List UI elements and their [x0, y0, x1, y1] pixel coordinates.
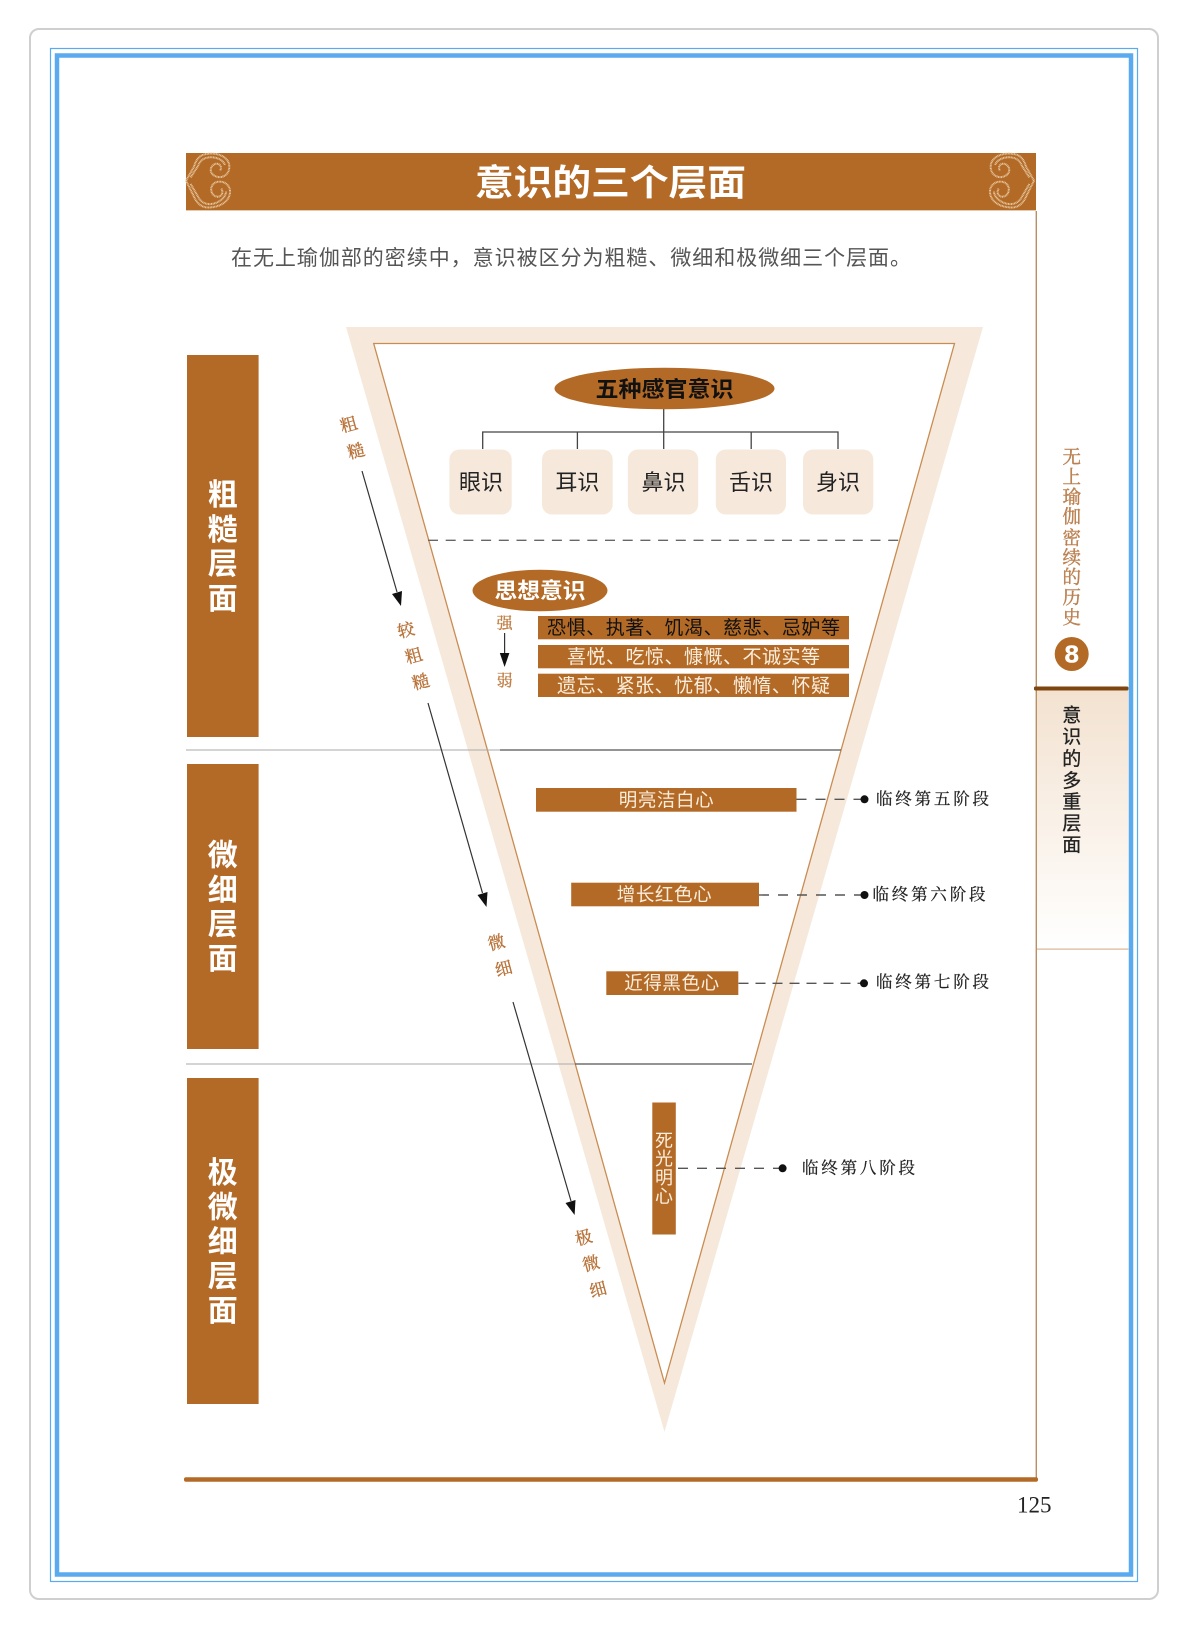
- box: body consciousness: [803, 450, 873, 514]
- callout: stage five: 临终第五阶段: [876, 790, 990, 808]
- icon: right cloud ornament: [990, 154, 1034, 208]
- callout: stage eight: [678, 1158, 916, 1178]
- level divider 1: [186, 749, 841, 751]
- panel: subtle level label: 细: [208, 874, 238, 908]
- bar: red increase mind: [571, 883, 759, 906]
- panel: very subtle level label: 细: [208, 1226, 238, 1259]
- side chapter title: 续: [1062, 548, 1081, 569]
- diagonal label: subtle: 微: [486, 932, 507, 954]
- side chapter title: 上: [1062, 468, 1081, 488]
- side chapter title: 密: [1062, 528, 1081, 550]
- bar: white appearance mind: [536, 788, 796, 812]
- side chapter title: 历: [1062, 588, 1081, 609]
- side chapter title: 史: [1062, 608, 1081, 629]
- icon: left cloud ornament: [186, 154, 230, 208]
- box: body consciousness: 身识: [816, 470, 860, 495]
- callout: stage seven: [738, 972, 990, 991]
- panel: subtle level label: 层: [208, 908, 238, 942]
- arrow: strong to weak: [500, 633, 509, 667]
- ellipse: five sense consciousness: 五种感官意识: [596, 377, 734, 402]
- bar: white appearance mind: 明亮洁白心: [619, 790, 714, 810]
- diagonal label: very subtle: 极: [573, 1227, 594, 1249]
- panel: very subtle level label: 微: [208, 1192, 238, 1224]
- bar: emotions row 2: 喜悦、吃惊、慷慨、不诚实等: [567, 645, 820, 668]
- diagonal label: very subtle: 细: [587, 1279, 609, 1301]
- diagonal label: coarse: 粗: [338, 413, 359, 436]
- arrow: subtle to very subtle: [513, 1002, 576, 1215]
- box: tongue consciousness: [716, 450, 786, 514]
- callout: stage eight: 临终第八阶段: [802, 1158, 916, 1178]
- side tab: current section: 面: [1062, 835, 1081, 856]
- dashed divider: [428, 539, 901, 541]
- bar: emotions row 3: 遗忘、紧张、忧郁、懒惰、怀疑: [557, 675, 830, 697]
- callout: stage six: 临终第六阶段: [872, 885, 986, 904]
- side chapter title: 无: [1062, 448, 1081, 468]
- side chapter title: [1062, 448, 1081, 629]
- label: strong: 强: [497, 614, 514, 632]
- chapter number badge: [1055, 637, 1089, 671]
- ellipse: thought consciousness: [472, 570, 608, 611]
- page number: 125: [1017, 1492, 1052, 1518]
- callout: stage five: [796, 790, 990, 808]
- diagonal label: very subtle: [573, 1227, 609, 1301]
- side chapter title: 的: [1062, 568, 1081, 588]
- panel: coarse level label: 面: [208, 583, 238, 616]
- right page rule: [1036, 211, 1037, 1478]
- bottom rule: [184, 1477, 1038, 1482]
- bar: red increase mind: 增长红色心: [617, 884, 712, 905]
- side tab: current section: [1034, 686, 1128, 950]
- diagonal label: coarse: [338, 413, 367, 463]
- inverted triangle: [346, 327, 983, 1432]
- ellipse: thought consciousness: 思想意识: [494, 578, 586, 604]
- side tab: current section: 意: [1062, 704, 1081, 726]
- ellipse: five sense consciousness: [554, 368, 774, 409]
- panel: very subtle level label: [187, 1078, 259, 1404]
- panel: coarse level label: 层: [208, 548, 238, 581]
- side chapter title: 伽: [1062, 507, 1081, 528]
- intro text: 在无上瑜伽部的密续中，意识被区分为粗糙、微细和极微细三个层面。: [231, 247, 911, 270]
- diagonal label: less coarse: [395, 619, 432, 694]
- box: ear consciousness: 耳识: [555, 470, 599, 495]
- bar: emotions row 1: 恐惧、执著、饥渴、慈悲、忌妒等: [547, 617, 840, 639]
- diagonal label: subtle: [486, 932, 514, 980]
- bar: clear light of death mind: 光: [655, 1149, 673, 1169]
- diagonal label: less coarse: 糙: [410, 671, 432, 694]
- bar: near attainment mind: 近得黑色心: [624, 972, 720, 994]
- title banner: [186, 153, 1036, 211]
- bar: clear light of death mind: 心: [655, 1186, 673, 1206]
- arrow: coarse to less coarse: [362, 471, 402, 606]
- side tab: current section: 多: [1062, 770, 1081, 792]
- level divider 2: [186, 1063, 752, 1065]
- diagonal label: less coarse: 较: [395, 619, 418, 642]
- diagonal label: coarse: 糙: [345, 440, 367, 463]
- panel: subtle level label: [187, 764, 259, 1049]
- bar: clear light of death mind: [652, 1102, 676, 1234]
- box: tongue consciousness: 舌识: [729, 470, 773, 495]
- panel: very subtle level label: 层: [208, 1260, 238, 1294]
- panel: coarse level label: 糙: [208, 514, 238, 547]
- panel: subtle level label: 微: [208, 840, 238, 872]
- tree connector lines: [483, 409, 838, 449]
- bar: clear light of death mind: 明: [655, 1168, 673, 1188]
- box: nose consciousness: [628, 450, 698, 514]
- box: ear consciousness: [542, 450, 613, 514]
- panel: coarse level label: [187, 355, 259, 737]
- box: nose consciousness: 鼻识: [641, 470, 686, 495]
- side tab: current section: 的: [1062, 748, 1081, 770]
- bar: clear light of death mind: 死: [655, 1131, 673, 1151]
- side tab: current section: 重: [1062, 791, 1081, 813]
- box: eye consciousness: 眼识: [459, 470, 503, 495]
- chapter number badge: 8: [1064, 642, 1080, 668]
- panel: coarse level label: 粗: [208, 479, 238, 512]
- diagonal label: subtle: 细: [493, 958, 514, 980]
- diagonal label: less coarse: 粗: [403, 644, 424, 668]
- arrow: less coarse to subtle: [428, 703, 488, 907]
- panel: very subtle level label: 极: [208, 1157, 238, 1190]
- callout: stage seven: 临终第七阶段: [876, 972, 990, 991]
- side chapter title: 瑜: [1062, 488, 1081, 508]
- panel: subtle level label: 面: [208, 943, 238, 976]
- side tab: current section: 识: [1062, 726, 1081, 748]
- label: weak: 弱: [497, 672, 513, 690]
- title: 意识的三个层面: [475, 162, 746, 203]
- diagonal label: very subtle: 微: [580, 1253, 602, 1275]
- callout: stage six: [759, 885, 986, 904]
- box: eye consciousness: [449, 450, 512, 514]
- panel: very subtle level label: 面: [208, 1295, 238, 1328]
- side tab: current section: 层: [1062, 814, 1081, 834]
- bar: near attainment mind: [606, 971, 738, 995]
